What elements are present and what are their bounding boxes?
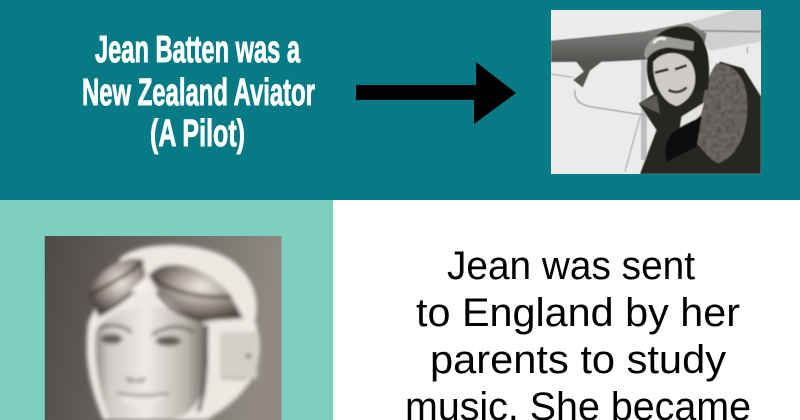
heading: Jean Batten was a New Zealand Aviator (A Pilot): Jean Batten was a: [95, 29, 301, 71]
panel: mint left column: [0, 200, 333, 420]
arrow: pointing to the photo: [356, 62, 516, 124]
text block: Jean was sent to England: to England by her: [416, 291, 740, 335]
heading: Jean Batten was a New Zealand Aviator (A Pilot): New Zealand Aviator: [82, 72, 315, 114]
panel: top teal banner: [0, 0, 800, 200]
photo: portrait of Jean Batten in flying helmet and goggles: [45, 236, 282, 420]
photo: Jean Batten smiling by an aeroplane wing: [551, 10, 761, 174]
text block: Jean was sent to England: Jean was sent: [447, 244, 695, 288]
heading: Jean Batten was a New Zealand Aviator (A Pilot): [82, 29, 315, 155]
heading: Jean Batten was a New Zealand Aviator (A Pilot): (A Pilot): [150, 113, 245, 155]
text block: Jean was sent to England: parents to study: [430, 338, 726, 382]
panel: white right column: [333, 200, 800, 420]
text block: Jean was sent to England: [405, 244, 751, 420]
